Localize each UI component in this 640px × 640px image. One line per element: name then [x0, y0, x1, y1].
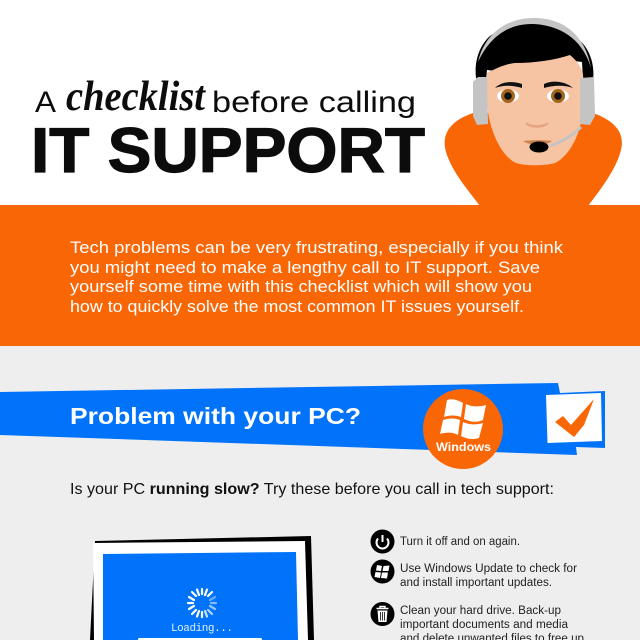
section heading: Problem with your PC? — [70, 403, 361, 429]
nose — [526, 123, 548, 127]
text: power: Turn it off and on again. — [400, 536, 520, 548]
text: clean hard drive: Clean your hard drive. Back-up — [400, 605, 561, 617]
left ear cup — [473, 77, 488, 125]
loading text: Loading... — [171, 623, 233, 635]
monitor frame — [93, 541, 308, 640]
windows badge: Windows — [436, 442, 491, 454]
blue ribbon — [0, 383, 605, 455]
checklist — [370, 530, 584, 640]
icon: power — [370, 530, 394, 554]
title: before calling — [212, 86, 416, 119]
text: windows update: Use Windows Update to check for — [400, 563, 577, 575]
face — [486, 55, 584, 165]
text: windows update: and install important updates. — [400, 577, 552, 589]
progress bar — [138, 638, 262, 640]
gray lower background — [0, 346, 640, 640]
intro paragraph: Tech problems can be very frustrating, especially if you think — [70, 239, 564, 257]
mouth — [523, 140, 552, 145]
title: checklist — [66, 74, 206, 120]
intro paragraph: yourself some time with this checklist which will show you — [70, 278, 532, 296]
illustration: support agent — [445, 18, 622, 206]
title: A — [35, 86, 56, 119]
section question: Is your PC running slow? Try these before you call in tech support: — [70, 481, 554, 498]
monitor illustration — [90, 536, 314, 640]
section banner: problem with your PC — [0, 383, 605, 469]
microphone — [530, 127, 581, 152]
orange intro band — [0, 205, 640, 346]
right eye — [547, 89, 569, 103]
item: turn off and on — [370, 530, 520, 554]
loading spinner — [188, 589, 216, 617]
agent shoulders — [445, 113, 622, 206]
title: IT SUPPORT — [31, 116, 425, 186]
intro paragraph: you might need to make a lengthy call to IT support. Save — [70, 259, 540, 277]
item: windows update — [370, 560, 577, 589]
intro paragraph — [70, 239, 564, 316]
text: windows update — [400, 563, 577, 589]
icon: windows — [370, 560, 394, 584]
windows badge — [423, 389, 503, 469]
title — [31, 74, 425, 186]
text: clean hard drive: important documents and media — [400, 619, 569, 631]
icon: trash — [370, 602, 394, 626]
left eye — [497, 89, 519, 103]
headset band — [478, 18, 591, 68]
text: clean hard drive — [400, 605, 584, 640]
monitor shadow — [90, 536, 314, 640]
check box — [546, 393, 602, 443]
hair — [476, 23, 593, 80]
monitor screen — [103, 552, 298, 640]
intro paragraph: how to quickly solve the most common IT issues yourself. — [70, 298, 524, 316]
right ear cup — [580, 77, 595, 125]
eyebrows — [495, 82, 573, 88]
item: clean hard drive — [370, 602, 584, 640]
